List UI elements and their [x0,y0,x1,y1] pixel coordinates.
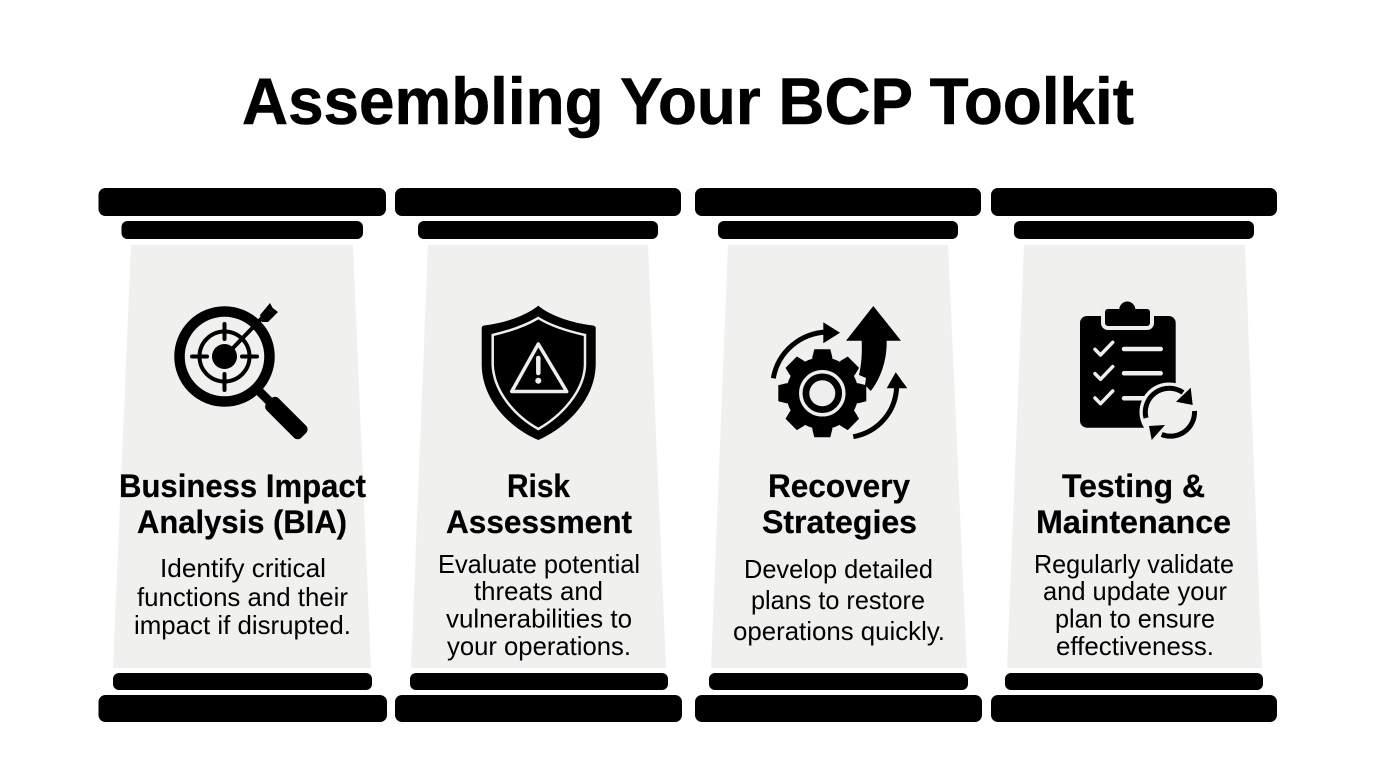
panel: Business Impact Analysis [98,188,387,722]
panel: Risk Assessment [395,188,682,722]
description: Evaluate potential [438,549,640,579]
heading [762,468,917,540]
description: Develop detailed [744,554,933,584]
icon: shield with warning [482,306,596,440]
column base [395,673,682,722]
icon: gear with arrows [773,306,907,437]
title: Assembling Your BCP Toolkit [242,64,1134,138]
description: and update your [1043,576,1227,606]
column top cap [991,188,1277,239]
heading: Maintenance [1036,504,1231,540]
icon: clipboard with refresh [1080,302,1198,442]
description: threats and [474,576,603,606]
panel: Recovery Strategies [695,188,982,722]
panel: Testing and Maintenance [991,188,1277,722]
column top cap [98,188,386,239]
description: functions and their [137,582,348,612]
column top cap [695,188,981,239]
column shaft [1007,245,1262,668]
heading: Strategies [762,504,917,540]
heading: Business Impact [119,468,366,504]
heading [446,468,632,540]
column base [991,673,1277,722]
column base [695,673,982,722]
description: Regularly validate [1034,549,1234,579]
description [1034,549,1234,661]
heading [1036,468,1231,540]
description: impact if disrupted. [134,610,351,640]
heading: Assessment [446,504,632,540]
heading [119,468,366,540]
icon: magnifier and target [180,303,310,441]
heading: Analysis (BIA) [137,504,347,540]
column base [98,673,387,722]
description: vulnerabilities to [446,604,632,634]
description: plans to restore [751,585,925,615]
column shaft [711,245,967,668]
description: plan to ensure [1055,604,1215,634]
description: your operations. [447,631,631,661]
description: effectiveness. [1056,631,1214,661]
heading: Testing & [1062,468,1205,504]
description: operations quickly. [733,616,945,646]
heading: Risk [507,468,570,504]
column shaft [113,245,371,668]
heading: Recovery [768,468,910,504]
description [438,549,640,661]
description [134,553,351,640]
column shaft [411,245,666,668]
description [733,554,945,646]
column top cap [395,188,681,239]
description: Identify critical [160,553,326,583]
